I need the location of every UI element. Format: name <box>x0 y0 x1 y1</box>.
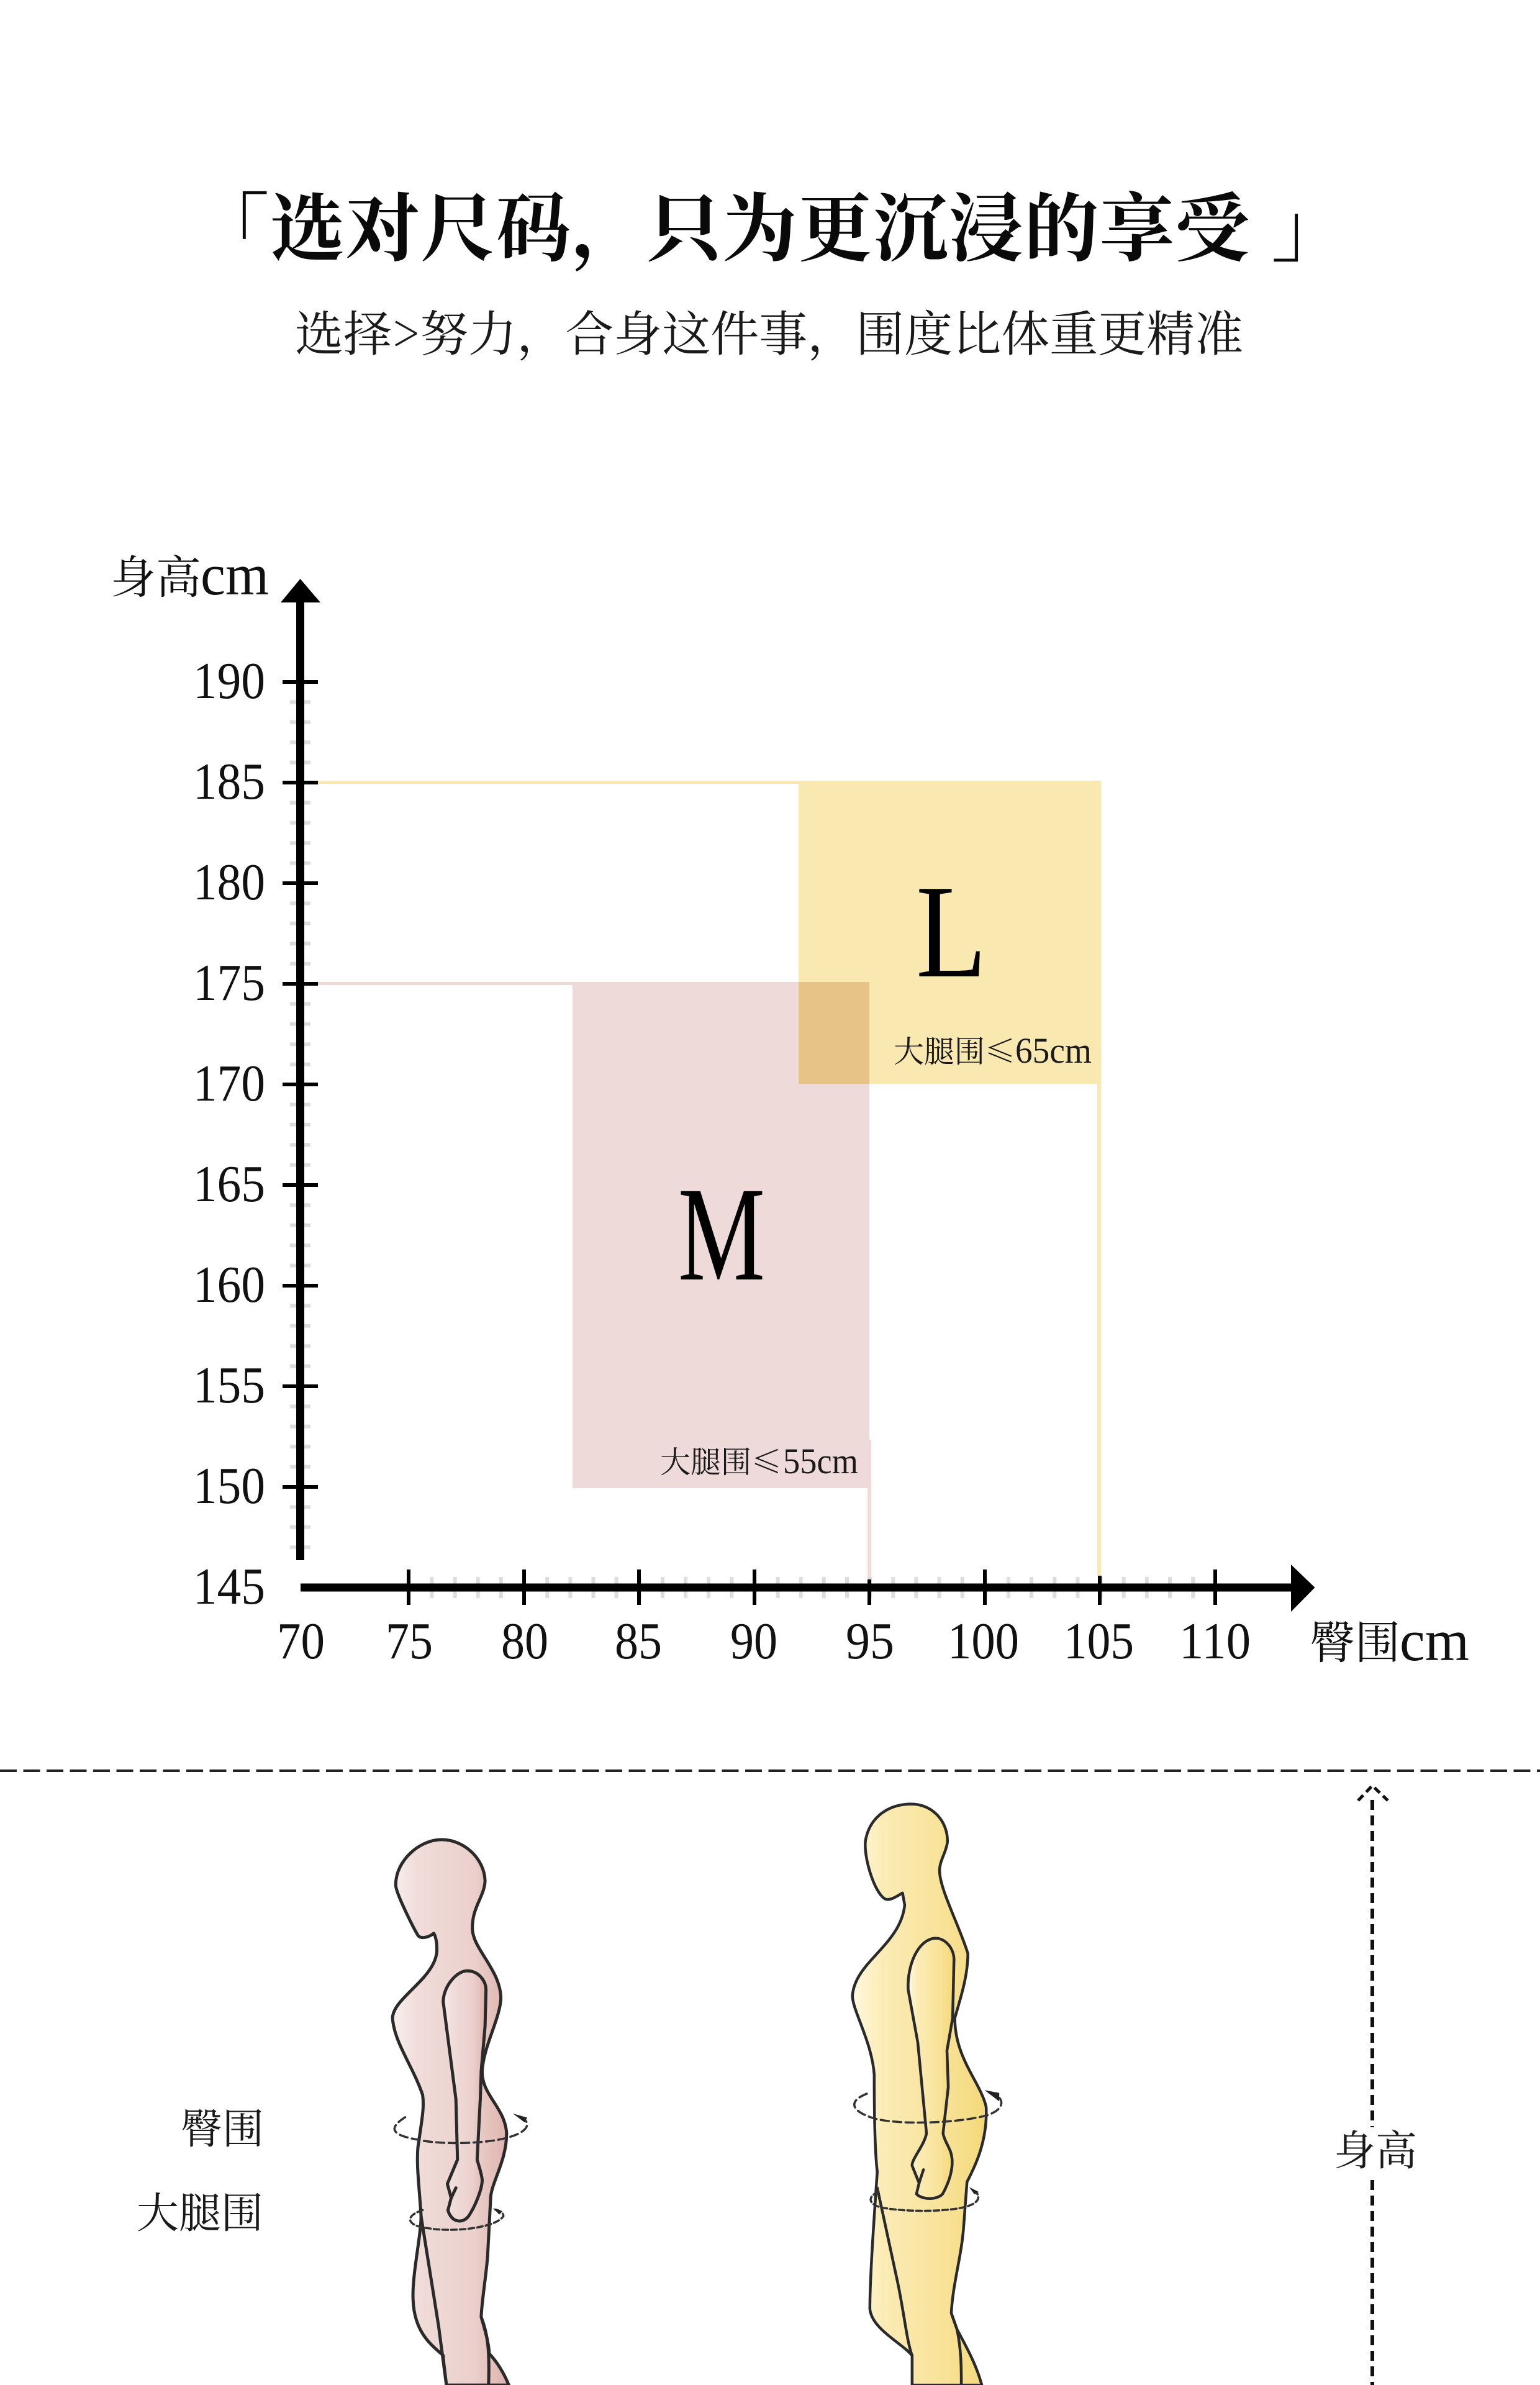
x axis labels: 85 <box>615 1612 662 1670</box>
size L region <box>318 781 1101 1576</box>
x axis <box>301 1565 1315 1612</box>
note: L thigh: 65cm <box>1015 1030 1092 1071</box>
figure: M mannequin <box>392 1840 527 2385</box>
letter L: L <box>916 857 987 1006</box>
thigh measuring ring <box>410 2209 504 2230</box>
hip measuring ring <box>394 2117 527 2143</box>
x axis labels <box>277 1612 1251 1670</box>
x axis labels: 95 <box>846 1612 894 1670</box>
x axis title <box>1310 1606 1469 1673</box>
note: M thigh: 大腿围≤ <box>660 1438 782 1482</box>
x axis labels: 100 <box>948 1612 1019 1670</box>
y axis labels: 165 <box>193 1155 265 1213</box>
subtitle: 选择>努力，合身这件事，围度比体重更精准 <box>295 296 1243 365</box>
arrow: x axis <box>1291 1565 1315 1612</box>
height arrow <box>1358 1786 1388 2385</box>
y axis labels: 145 <box>193 1558 265 1615</box>
y axis labels: 175 <box>193 954 265 1012</box>
size M region <box>318 982 871 1579</box>
y axis title: cm <box>201 543 269 607</box>
hip measuring ring <box>854 2093 1002 2122</box>
x axis labels: 90 <box>730 1612 777 1670</box>
y axis labels: 185 <box>193 753 265 811</box>
note: M thigh <box>660 1438 858 1482</box>
figure: L mannequin <box>853 1804 1002 2385</box>
y axis labels: 170 <box>193 1055 265 1112</box>
label: height: 身高 <box>1334 2118 1417 2178</box>
y axis labels: 155 <box>193 1356 265 1414</box>
x axis labels: 70 <box>277 1612 325 1670</box>
x axis labels: 75 <box>386 1612 433 1670</box>
x axis labels: 110 <box>1179 1612 1251 1670</box>
title: 」 <box>1272 170 1346 276</box>
y axis labels: 160 <box>193 1256 265 1314</box>
label: thigh: 大腿围 <box>137 2180 263 2240</box>
note: L thigh <box>894 1028 1092 1071</box>
label: hip: 臀围 <box>181 2096 264 2156</box>
note: M thigh: 55cm <box>783 1441 858 1481</box>
x axis labels: 80 <box>501 1612 548 1670</box>
overlap of M and L <box>799 982 869 1084</box>
y axis labels: 150 <box>193 1457 265 1515</box>
y axis labels: 180 <box>193 853 265 911</box>
note: L thigh: 大腿围≤ <box>894 1028 1015 1071</box>
y axis title <box>111 541 269 607</box>
letter M: M <box>678 1160 765 1309</box>
thigh measuring ring <box>871 2190 978 2211</box>
chart: size by height and hip <box>111 541 1469 1673</box>
x axis title: cm <box>1400 1609 1469 1673</box>
title: 「选对尺码，只为更沉浸的享受 <box>194 170 1251 276</box>
x axis title: 臀围 <box>1310 1606 1400 1671</box>
x axis labels: 105 <box>1064 1612 1134 1670</box>
arrow: y axis <box>281 579 320 602</box>
y axis title: 身高 <box>111 541 201 606</box>
y axis labels: 190 <box>193 652 265 710</box>
y axis labels <box>193 652 265 1615</box>
y axis <box>281 579 320 1560</box>
